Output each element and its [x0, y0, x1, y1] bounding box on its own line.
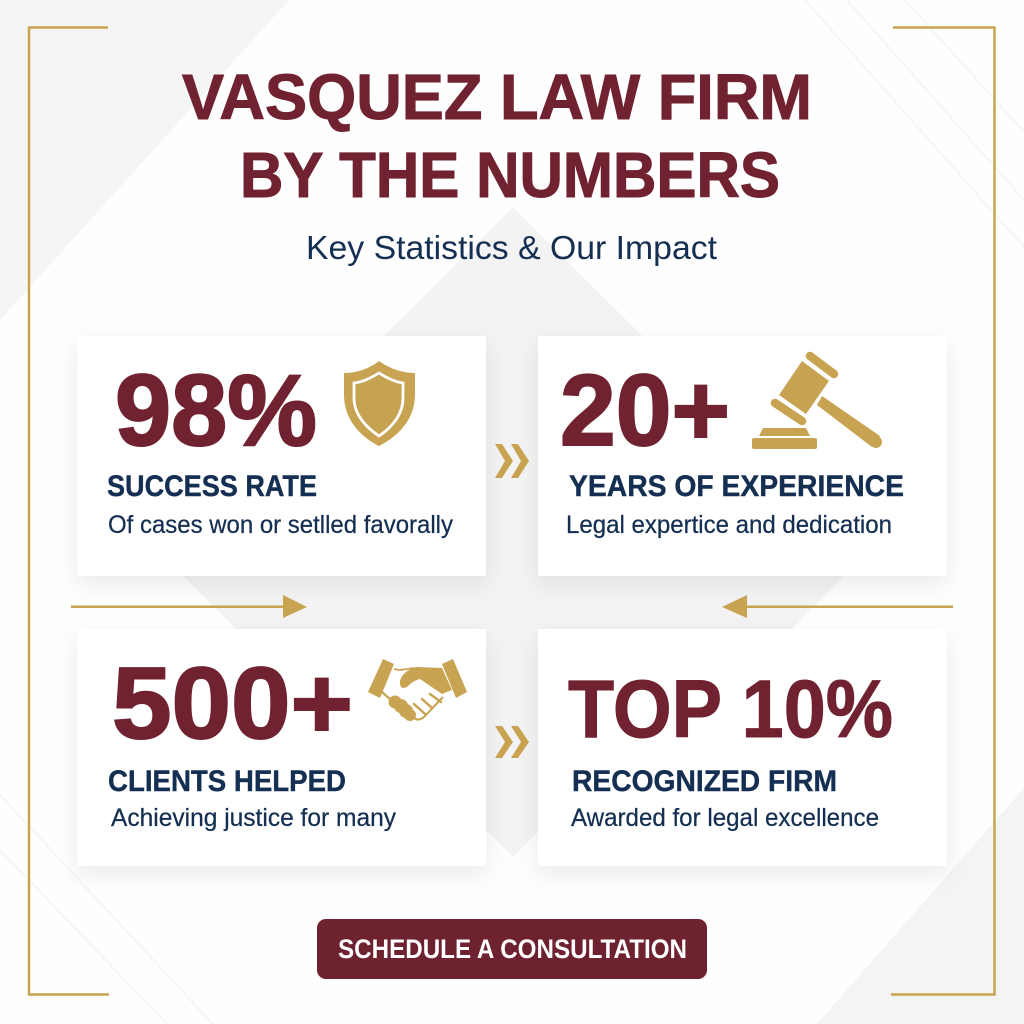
arrow: right pointing [71, 595, 307, 618]
label: years of experience: YEARS OF EXPERIENCE [569, 470, 904, 503]
stat: 500+: 500+ [112, 648, 353, 760]
panel: years of experience [538, 336, 947, 576]
description: clients helped: Achieving justice for many [111, 804, 396, 832]
icon: shield [344, 361, 415, 446]
button: schedule a consultation [317, 919, 707, 979]
description: recognized firm: Awarded for legal excellence [571, 804, 879, 832]
title: BY THE NUMBERS [240, 139, 780, 211]
stat: 98%: 98% [115, 355, 317, 467]
description: success rate: Of cases won or setlled favorally [108, 511, 453, 539]
label: success rate: SUCCESS RATE [107, 470, 317, 503]
label: clients helped: CLIENTS HELPED [108, 765, 346, 798]
icon: gavel [752, 356, 882, 449]
panel: clients helped [77, 629, 486, 866]
arrow: bottom chevrons [495, 726, 529, 758]
arrow: left pointing [722, 595, 953, 618]
stat: top 10%: TOP 10% [568, 664, 893, 755]
stat: 20+: 20+ [560, 355, 730, 467]
subtitle: Key Statistics & Our Impact [306, 229, 717, 266]
panel: recognized firm [538, 629, 947, 866]
title [182, 61, 812, 211]
label: recognized firm: RECOGNIZED FIRM [572, 765, 837, 798]
button: schedule a consultation: SCHEDULE A CONSULTATION [338, 934, 687, 964]
panel: success rate [77, 336, 486, 576]
arrow: top chevrons [495, 444, 529, 478]
description: years of experience: Legal expertice and dedication [566, 511, 892, 539]
icon: handshake [368, 659, 467, 721]
title: VASQUEZ LAW FIRM [182, 61, 812, 133]
